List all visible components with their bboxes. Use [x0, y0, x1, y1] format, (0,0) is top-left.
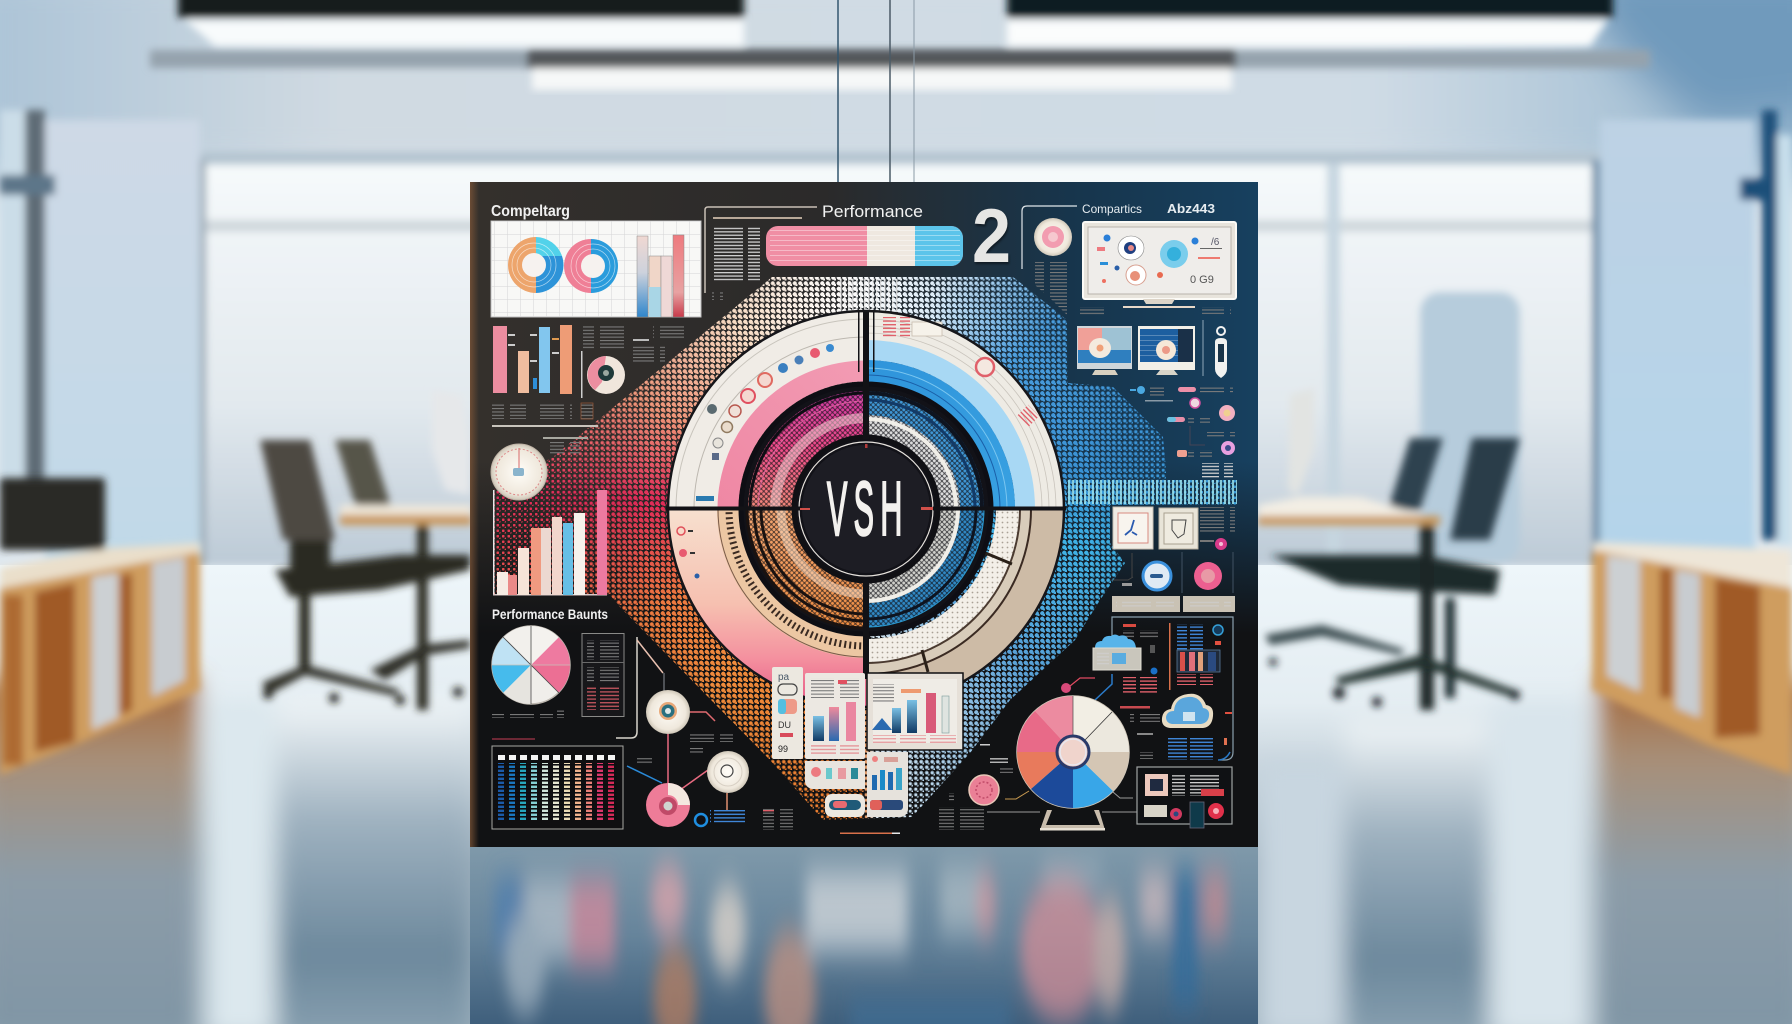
connector and text column: [705, 207, 817, 300]
text blocks beside bars: [581, 325, 687, 419]
large number 2: 2: [972, 194, 1011, 279]
heading: comparison label: Compartics: [1082, 202, 1142, 216]
striped progress bar: [766, 226, 963, 266]
donut: orange and blue: [508, 237, 563, 293]
dial quadrant: top right band: [869, 312, 1063, 506]
dial thin concentric rings: [741, 384, 991, 634]
frame with two round icons: [1112, 552, 1233, 593]
vertical hair lines above dial: [840, 279, 900, 312]
dial quadrant: top left icon band: [669, 312, 863, 506]
infographic content drawn over the board: [490, 204, 1237, 834]
dial outer ring: [668, 311, 1064, 707]
icon: node B: [707, 751, 749, 793]
icon: blue ring: [695, 814, 707, 826]
dial dark core: [739, 382, 993, 636]
card: icon strip: 99: [778, 744, 788, 754]
legend list on right side: [1130, 386, 1235, 478]
small pink node: [1061, 674, 1112, 700]
left desk and chairs: [260, 390, 472, 710]
card: icon strip: DU: [778, 720, 791, 730]
icon: large monitor dashboard: 0 G9: [1190, 274, 1214, 286]
card: small chart left: [805, 761, 865, 789]
dial halftone rings: [748, 391, 984, 627]
dial quadrant: bottom left band: [669, 510, 866, 706]
icon: cloud: [1162, 694, 1213, 728]
floor with streaked reflections: [0, 565, 1792, 1024]
dial centre hub: [802, 445, 930, 573]
text box: [582, 634, 624, 716]
ceiling lights: [178, 0, 1613, 90]
hub tick marks: [800, 444, 933, 510]
card: bars two: [867, 673, 963, 750]
bars on grid panel: [637, 235, 684, 317]
icon: monitor A: [1077, 326, 1132, 375]
icon: small disc: [587, 356, 625, 394]
bracket and disc icon: [1022, 206, 1077, 315]
donut: pink and blue: [564, 239, 618, 293]
card: bars one: [805, 673, 865, 759]
icon: large monitor dashboard: [1079, 222, 1236, 315]
card: icon strip: [772, 667, 803, 759]
icon: pill marker: [1202, 320, 1227, 378]
chart: wheel pie on stand: [1017, 696, 1129, 830]
beige labels: [1112, 596, 1235, 612]
halftone dot field around the central dial: [494, 277, 1237, 820]
node notes: [637, 733, 793, 830]
wheel notes and leader lines: [939, 744, 1137, 830]
card: pill one: [825, 794, 865, 817]
chart: colour column heatmap: [492, 746, 623, 829]
room: ceiling, walls and windows: [0, 0, 1792, 565]
heading: comparing: Compeltarg: [491, 203, 570, 220]
chart: four vertical bars: [492, 325, 572, 419]
icon: gauge dial: [491, 444, 547, 500]
dial quadrant: bottom right band: [866, 510, 1063, 706]
footer line: [840, 832, 900, 834]
hanging wires: [838, 0, 914, 182]
right desk and chairs: [1258, 388, 1520, 710]
heading: code label: Abz443: [1167, 201, 1215, 216]
connector lines: [492, 637, 727, 810]
panel: lower right data frame: [1112, 617, 1233, 760]
table reflection of the panel: [470, 847, 1258, 1024]
icon: server cloud: [1093, 634, 1141, 670]
icon: pink badge: [969, 775, 999, 805]
panel: dark infographic board: [470, 182, 1258, 847]
panel: bottom right framed report: [1137, 767, 1232, 828]
divider lines and note: [492, 425, 598, 455]
chart: grid panel with two donuts and bars: [491, 221, 701, 317]
icon: node A: [646, 690, 690, 734]
icon: node C: [646, 783, 690, 827]
chart: central dial: [666, 311, 1066, 707]
left shelf: [0, 478, 200, 775]
card: icon strip: pa: [778, 672, 790, 683]
heading: performance: Performance: [822, 202, 923, 221]
chart: tall bar chart on red halftone: [493, 490, 607, 596]
icon: large monitor dashboard: /6: [1211, 237, 1220, 248]
dial cross lines: [666, 312, 1066, 679]
panel: top right tiles: [1113, 507, 1235, 550]
card: small chart right: [867, 752, 908, 817]
chart: pie: [492, 626, 570, 718]
heading: performance points: Performance Baunts: [492, 606, 608, 622]
icon: monitor B: [1138, 326, 1195, 375]
dial centre label: VSH: [827, 468, 909, 552]
cyan vertical stripe band: [1067, 480, 1237, 504]
right shelf: [1592, 542, 1792, 775]
